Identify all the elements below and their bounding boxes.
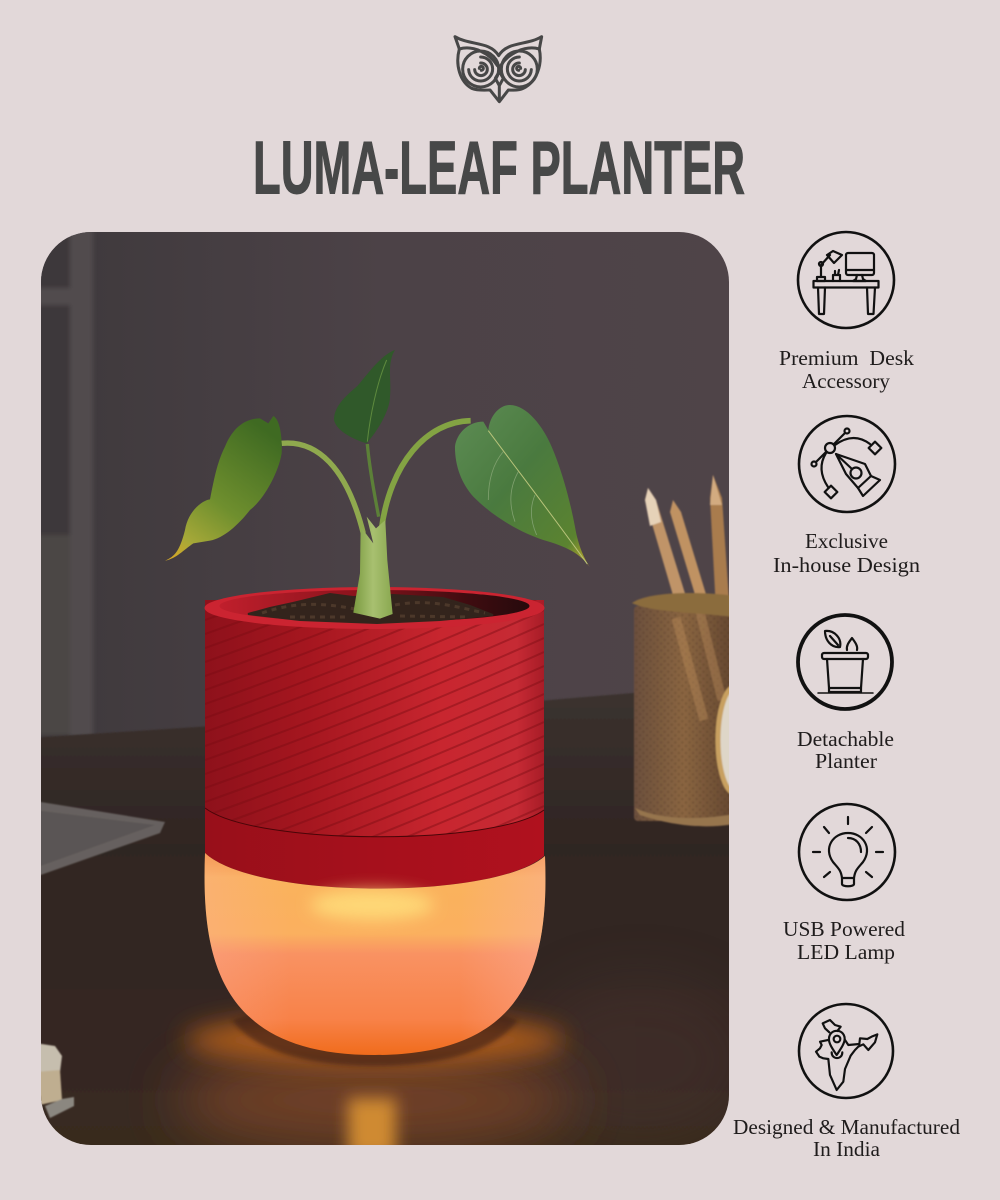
feature: detachable planter xyxy=(797,615,894,773)
left leaf xyxy=(165,416,282,561)
right leaf xyxy=(455,405,590,567)
pot: ribbed upper xyxy=(204,587,544,836)
feature: usb led lamp xyxy=(783,804,905,964)
plant xyxy=(165,350,590,619)
label: Designed & Manufactured xyxy=(733,1115,960,1139)
icon: india map with pin xyxy=(799,1004,893,1098)
label: Detachable xyxy=(797,727,894,751)
book stack xyxy=(41,1042,75,1118)
feature: usb led lamp: LED Lamp xyxy=(797,940,895,964)
label: Premium Desk xyxy=(779,346,915,370)
glowing lamp base xyxy=(205,853,545,1055)
pot band xyxy=(205,808,544,889)
feature: premium desk accessory xyxy=(779,232,915,393)
pencil holder xyxy=(632,475,729,828)
icon: planter xyxy=(798,615,892,709)
feature: exclusive design: In-house Design xyxy=(773,553,921,577)
feature: premium desk accessory: Accessory xyxy=(802,369,891,393)
feature: detachable planter: Planter xyxy=(815,749,877,773)
feature: made in india: In India xyxy=(813,1137,881,1161)
pot rim xyxy=(204,587,544,629)
label: USB Powered xyxy=(783,917,905,941)
product photo xyxy=(30,225,752,1158)
left stem xyxy=(282,443,363,533)
center stem xyxy=(367,444,379,517)
table glow xyxy=(160,1004,622,1145)
icon: desk xyxy=(798,232,894,328)
icon: pen tool xyxy=(799,416,895,512)
wall xyxy=(41,232,729,752)
icon: light bulb xyxy=(799,804,895,900)
feature: made in india xyxy=(733,1004,960,1161)
laptop xyxy=(35,801,165,877)
table xyxy=(30,684,740,1150)
top leaf xyxy=(334,350,395,443)
shelf at left xyxy=(41,232,94,735)
soil xyxy=(248,594,493,623)
right stem xyxy=(381,421,471,530)
logo: owl xyxy=(455,37,542,102)
feature: exclusive design xyxy=(773,416,921,577)
label: Exclusive xyxy=(805,529,888,553)
stem base xyxy=(353,517,393,619)
